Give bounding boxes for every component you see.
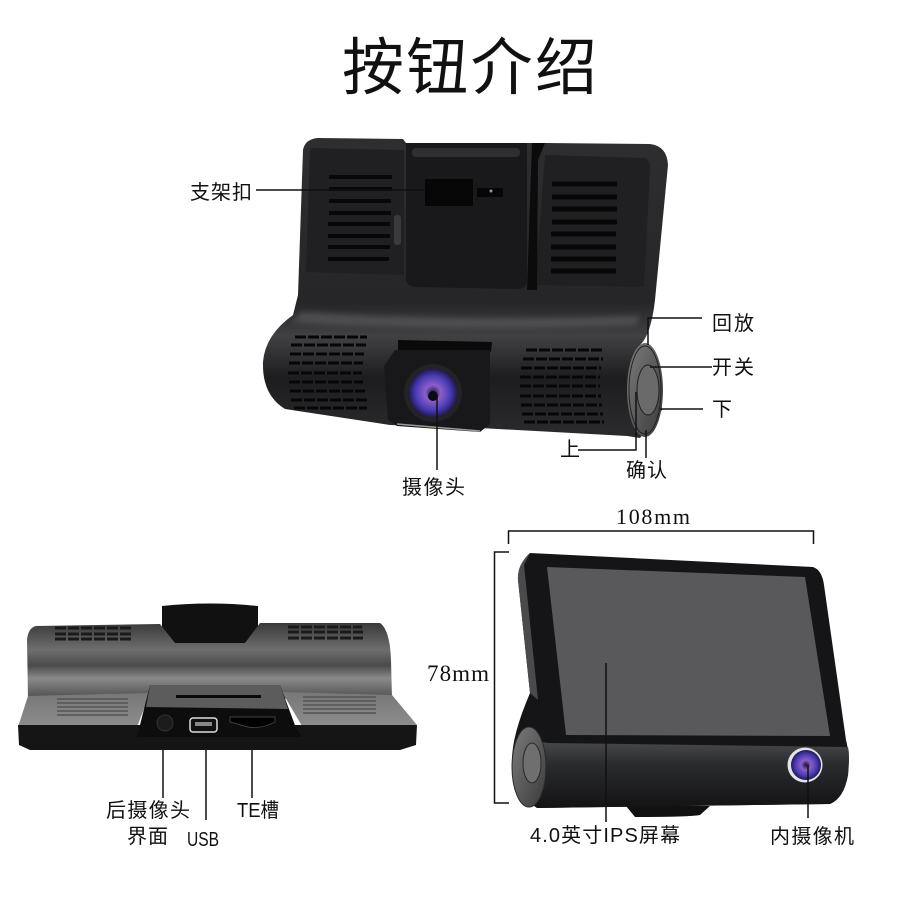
tray vents: [57, 697, 376, 715]
dimension bracket: height: [494, 552, 509, 803]
label: interface: 界面: [127, 826, 168, 848]
dimension bracket: width: [508, 531, 814, 544]
label: confirm: 确认: [626, 459, 667, 482]
rear camera lens: [404, 364, 462, 422]
base edge: [18, 725, 417, 750]
callout lines: front view: [606, 663, 808, 822]
device: rear view: [263, 138, 668, 438]
callout lines: bottom view: [163, 750, 252, 820]
lower trays: [18, 693, 150, 727]
label: usb: USB: [187, 829, 219, 851]
label: height: 78mm: [427, 661, 489, 686]
label: inner camera: 内摄像机: [770, 825, 854, 848]
top vents: [55, 627, 363, 639]
port block: [137, 685, 302, 737]
label: bracket clip: 支架扣: [190, 181, 252, 204]
left rear vents: [328, 177, 392, 259]
port: audio jack: [157, 715, 173, 731]
label: width: 108mm: [616, 504, 690, 529]
label: down: 下: [712, 399, 732, 421]
label: rear camera port: 后摄像头: [106, 799, 190, 822]
front right vents: [520, 350, 604, 422]
label: screen: 4.0英寸IPS屏幕: [530, 824, 680, 847]
label: tf slot: TE槽: [237, 799, 279, 822]
front left vents: [288, 337, 367, 408]
right recessed panel: [535, 155, 650, 287]
upper body: [27, 623, 392, 700]
right rear vents: [551, 184, 617, 271]
lower roller: [525, 740, 849, 808]
mount stub: [162, 604, 258, 643]
label: power: 开关: [712, 356, 754, 379]
left side edge: [518, 553, 538, 700]
inner camera lens: [788, 748, 822, 782]
bracket mount plate: [394, 143, 545, 290]
front body: [512, 553, 849, 808]
port: tf slot: [230, 717, 275, 727]
label: playback: 回放: [712, 312, 754, 335]
button cap: [627, 343, 663, 437]
left recessed panel: [306, 148, 404, 275]
title: 按钮介绍: [342, 34, 597, 103]
label: camera: 摄像头: [402, 476, 465, 499]
highlight band: [292, 312, 640, 328]
rear body shell: [263, 138, 668, 438]
label: up: 上: [560, 438, 580, 461]
port: usb: [190, 718, 217, 732]
device: front view: [512, 553, 849, 817]
side buttons: [512, 727, 546, 807]
device: bottom view: [18, 604, 417, 750]
screen: [547, 567, 830, 736]
camera housing: [384, 340, 492, 432]
callout lines: rear view: [256, 190, 712, 470]
stand: [626, 806, 710, 817]
